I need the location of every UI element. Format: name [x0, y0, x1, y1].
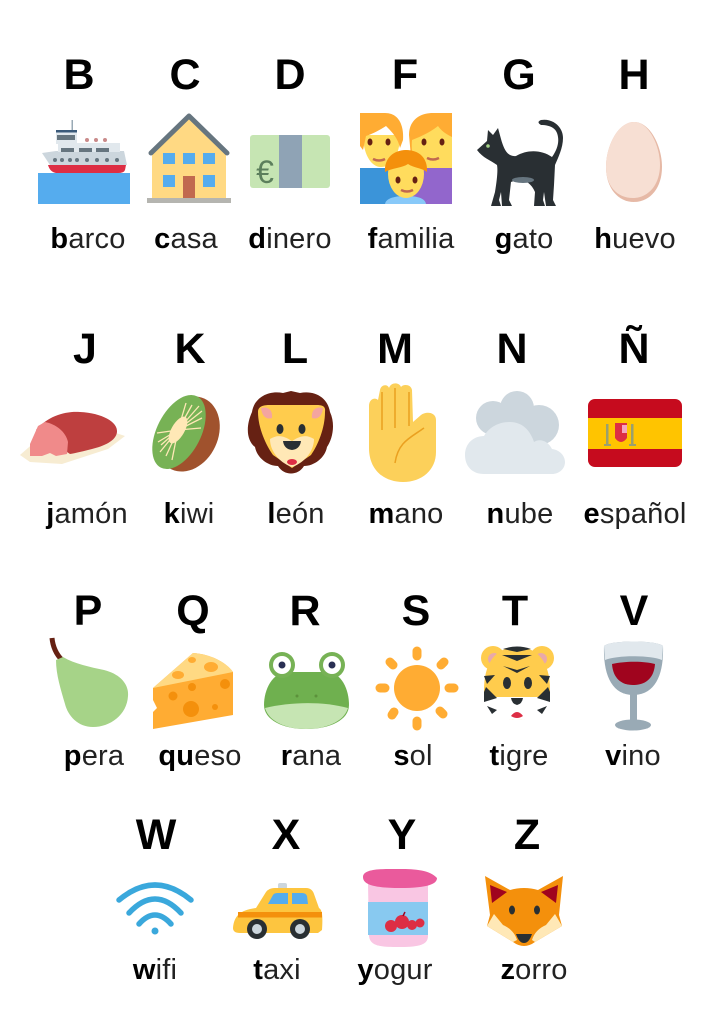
- word labels row 4: taxi: [253, 954, 301, 986]
- word labels row 2: mano: [368, 498, 444, 530]
- word labels row 2: jamón: [45, 498, 128, 530]
- letter headings row 2: M: [377, 325, 413, 373]
- letter headings row 2: J: [73, 325, 97, 373]
- word labels row 4: zorro: [500, 954, 568, 986]
- letter headings row 3: Q: [176, 587, 210, 635]
- icon: Spain flag: [588, 399, 682, 467]
- letter headings row 3: V: [620, 587, 649, 635]
- icon: family: [360, 113, 452, 204]
- letter headings row 1: D: [274, 51, 306, 99]
- letter headings row 3: T: [502, 587, 528, 635]
- icon: cheese: [153, 653, 233, 729]
- word labels row 1: casa: [154, 223, 219, 255]
- icon: black cat: [477, 120, 563, 206]
- word labels row 1: [50, 223, 676, 255]
- icon: egg: [606, 122, 662, 202]
- icon: taxi: [233, 883, 322, 939]
- word labels row 3: vino: [605, 740, 661, 772]
- word labels row 3: tigre: [489, 740, 549, 772]
- word labels row 3: [64, 740, 661, 772]
- icon: tiger: [481, 646, 554, 720]
- icon: wine glass: [604, 642, 663, 730]
- letter headings row 1: C: [169, 51, 201, 99]
- word labels row 2: nube: [487, 498, 553, 530]
- letter headings row 3: S: [402, 587, 430, 635]
- icon: kiwi: [141, 386, 232, 482]
- icon: raised hand: [369, 383, 436, 482]
- letter headings row 1: H: [618, 51, 650, 99]
- letter headings row 2: N: [496, 325, 528, 373]
- word labels row 3: queso: [158, 740, 242, 772]
- icon: sun: [380, 651, 454, 726]
- word labels row 1: huevo: [594, 223, 676, 255]
- word labels row 2: [45, 498, 687, 530]
- icon: money: [250, 135, 330, 190]
- letter headings row 4: W: [136, 811, 177, 859]
- icon: house: [147, 116, 231, 203]
- icon: pear: [52, 638, 128, 727]
- icon: frog: [264, 652, 349, 729]
- icon: ship: [38, 120, 130, 204]
- word labels row 4: wifi: [132, 954, 177, 986]
- letter headings row 4: X: [272, 811, 301, 859]
- letter headings row 2: K: [174, 325, 206, 373]
- letter headings row 3: R: [289, 587, 321, 635]
- letter headings row 2: Ñ: [618, 325, 650, 373]
- letter headings row 4: Z: [514, 811, 540, 859]
- letter headings row 2: L: [282, 325, 308, 373]
- word labels row 3: sol: [393, 740, 433, 772]
- word labels row 1: dinero: [248, 223, 332, 255]
- icon: wifi: [119, 885, 191, 932]
- word labels row 1: barco: [50, 223, 126, 255]
- letter headings row 1: B: [63, 51, 95, 99]
- word labels row 2: español: [583, 498, 687, 530]
- letter headings row 2: [73, 325, 650, 373]
- word labels row 3: pera: [64, 740, 125, 772]
- word labels row 3: rana: [281, 740, 342, 772]
- letter headings row 4: Y: [388, 811, 416, 859]
- icon: lion: [248, 391, 333, 474]
- word labels row 4: [132, 954, 568, 986]
- word labels row 1: gato: [495, 223, 553, 255]
- icon: money: €: [256, 154, 274, 190]
- letter headings row 1: F: [392, 51, 418, 99]
- icon: cloud: [465, 391, 565, 474]
- letter headings row 4: [136, 811, 540, 859]
- letter headings row 1: [63, 51, 650, 99]
- icon: fox: [485, 876, 563, 946]
- word labels row 2: león: [267, 498, 325, 530]
- icon: yogurt: [363, 869, 437, 947]
- icon: ham: [20, 412, 125, 464]
- letter headings row 3: [74, 587, 649, 635]
- word labels row 2: kiwi: [164, 498, 214, 530]
- word labels row 4: yogur: [357, 954, 433, 986]
- letter headings row 1: G: [502, 51, 536, 99]
- word labels row 1: familia: [368, 223, 455, 255]
- letter headings row 3: P: [74, 587, 102, 635]
